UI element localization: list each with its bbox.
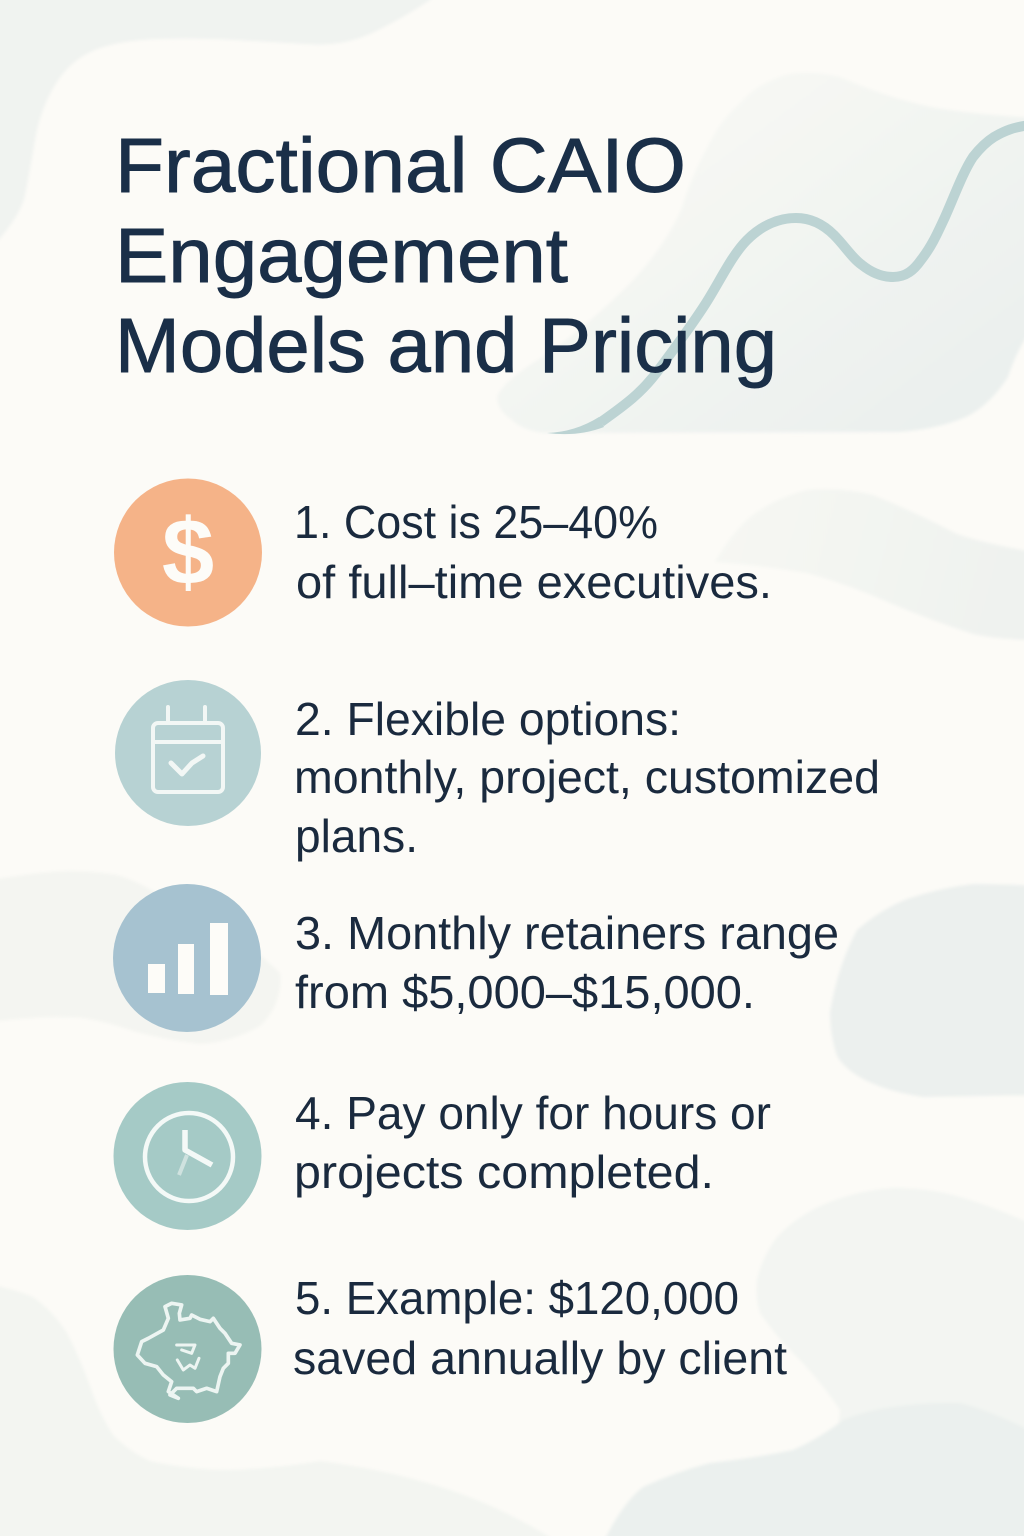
title: Models and Pricing xyxy=(115,303,777,389)
icon: dollar sign: $ xyxy=(162,499,214,604)
text: cost statement: 1. Cost is 25–40% xyxy=(294,496,658,548)
text: example xyxy=(293,1272,787,1384)
text: cost statement xyxy=(294,496,772,608)
text: retainers xyxy=(295,907,839,1018)
text: pay only xyxy=(294,1087,771,1198)
item 1: cost xyxy=(114,478,772,626)
icon: clock xyxy=(114,1082,262,1230)
icon: bar chart xyxy=(113,884,261,1032)
text: cost statement: of full–time executives. xyxy=(296,556,772,608)
text: example: 5. Example: $120,000 xyxy=(295,1272,739,1324)
text: flexible options xyxy=(294,693,880,862)
decorative trend curve xyxy=(547,125,1024,434)
item 3: monthly retainers xyxy=(113,884,839,1032)
text: example: saved annually by client xyxy=(293,1332,787,1384)
text: pay only: projects completed. xyxy=(294,1146,714,1198)
text: flexible options: plans. xyxy=(295,810,418,862)
text: flexible options: monthly, project, customized xyxy=(294,751,880,803)
icon: dollar sign xyxy=(114,478,262,626)
item 2: flexible options xyxy=(115,680,880,862)
title xyxy=(115,123,777,389)
text: retainers: from $5,000–$15,000. xyxy=(295,966,755,1018)
title: Engagement xyxy=(115,213,568,299)
text: retainers: 3. Monthly retainers range xyxy=(295,907,839,959)
icon: calendar with check xyxy=(115,680,261,826)
text: flexible options: 2. Flexible options: xyxy=(295,693,681,745)
text: pay only: 4. Pay only for hours or xyxy=(295,1087,771,1139)
item 5: example savings xyxy=(114,1272,787,1423)
icon: hand-drawn piggy bank xyxy=(114,1275,262,1423)
title: Fractional CAIO xyxy=(115,123,686,209)
item 4: pay for hours xyxy=(114,1082,771,1230)
